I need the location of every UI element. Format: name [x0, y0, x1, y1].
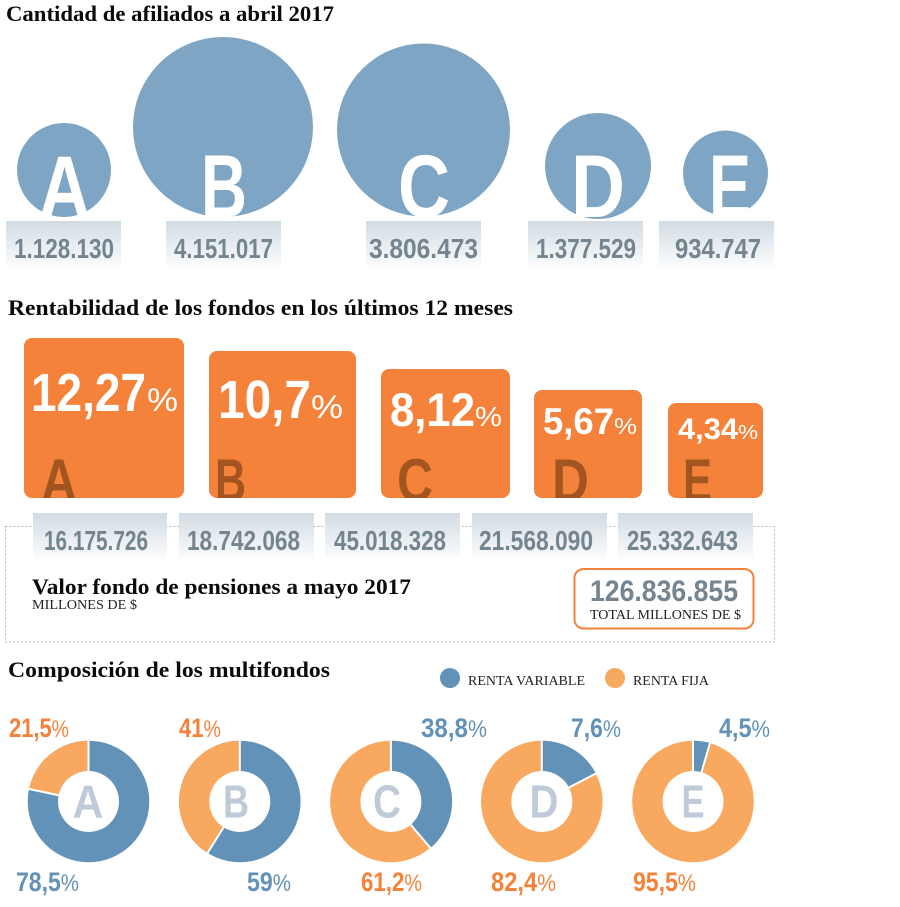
bubble B — [133, 37, 313, 236]
bubble E: E — [709, 136, 751, 236]
donut A: A — [72, 776, 104, 828]
bubble C: C — [398, 136, 450, 236]
label B renta variable: 59% — [247, 867, 291, 897]
bubble D — [545, 113, 651, 236]
square A: rentabilidad: 12,27 — [31, 363, 146, 423]
legend — [440, 668, 710, 689]
square C: rentabilidad — [381, 369, 510, 498]
square A: rentabilidad: % — [147, 382, 178, 418]
label B renta fija: 41% — [179, 713, 221, 743]
fondo value A: 16.175.726 — [44, 525, 148, 556]
square D: rentabilidad — [534, 390, 642, 498]
label D renta fija: 82,4% — [491, 867, 556, 897]
afiliados value E: 934.747 — [675, 233, 761, 264]
fondo value C: 45.018.328 — [334, 525, 446, 556]
bubble A — [17, 123, 111, 237]
fondo value B: 18.742.068 — [187, 525, 300, 556]
title: cantidad de afiliados: Cantidad de afiliados a abril 2017 — [6, 1, 334, 26]
square C: rentabilidad: % — [475, 401, 502, 432]
square B: rentabilidad — [209, 351, 356, 514]
bubble D: D — [571, 136, 625, 236]
square A: rentabilidad: A — [41, 447, 77, 514]
square E: rentabilidad: E — [683, 447, 712, 514]
fondo value E: 25.332.643 — [627, 525, 738, 556]
afiliados value A: 1.128.130 — [14, 233, 114, 264]
donut A — [28, 741, 149, 862]
title: composición: Composición de los multifondos — [8, 657, 330, 682]
callout: total: 126.836.855 — [590, 575, 738, 608]
bubble chart: afiliados — [17, 37, 768, 237]
title: rentabilidad: Rentabilidad de los fondos en los últimos 12 meses — [8, 295, 513, 320]
fondo value D: 21.568.090 — [479, 525, 593, 556]
square E: rentabilidad: % — [738, 422, 758, 444]
fondo value B — [179, 513, 314, 559]
afiliados value C: 3.806.473 — [369, 233, 478, 264]
square E: rentabilidad — [668, 403, 763, 498]
label A renta fija: 21,5% — [9, 713, 69, 743]
square C: rentabilidad: 8,12 — [390, 383, 475, 436]
donut B: B — [223, 776, 249, 828]
label D renta variable: 7,6% — [571, 713, 621, 743]
donut C: C — [373, 776, 401, 828]
donut E: E — [682, 776, 704, 828]
fondo value E — [618, 513, 753, 559]
label A renta variable: 78,5% — [16, 867, 79, 897]
donut E — [632, 741, 754, 862]
donut D: D — [530, 776, 558, 828]
legend: RENTA FIJA — [633, 674, 710, 689]
label C renta fija: 61,2% — [361, 867, 422, 897]
callout: total: TOTAL MILLONES DE $ — [590, 608, 741, 623]
square D: rentabilidad: % — [614, 413, 637, 439]
fondo value A — [33, 513, 167, 559]
label C renta variable: 38,8% — [421, 713, 487, 743]
legend: RENTA VARIABLE — [468, 674, 585, 689]
bubble A: A — [38, 137, 90, 237]
square B: rentabilidad: % — [311, 389, 343, 425]
afiliados value B — [166, 221, 281, 267]
bubble B: B — [201, 136, 247, 236]
square D: rentabilidad: D — [552, 447, 589, 514]
label E renta fija: 95,5% — [633, 867, 696, 897]
square D: rentabilidad: 5,67 — [543, 401, 614, 442]
donut C — [330, 741, 452, 862]
bubble C — [337, 44, 510, 236]
afiliados value A — [6, 221, 121, 267]
fondo value D — [472, 513, 607, 559]
donut B — [179, 741, 301, 862]
afiliados value D — [528, 221, 643, 267]
heading: valor fondo de pensiones: MILLONES DE $ — [32, 598, 137, 613]
afiliados value D: 1.377.529 — [536, 233, 636, 264]
square C: rentabilidad: C — [397, 447, 433, 514]
heading: valor fondo de pensiones: Valor fondo de pensiones a mayo 2017 — [32, 574, 411, 599]
afiliados value B: 4.151.017 — [174, 233, 273, 264]
square E: rentabilidad: 4,34 — [678, 413, 738, 446]
bubble E — [683, 130, 768, 236]
afiliados value C — [366, 221, 481, 267]
square A: rentabilidad — [24, 338, 184, 514]
square B: rentabilidad: 10,7 — [218, 370, 311, 430]
afiliados value E — [659, 221, 774, 267]
label E renta variable: 4,5% — [719, 713, 770, 743]
square B: rentabilidad: B — [215, 447, 246, 514]
fondo value C — [325, 513, 460, 559]
callout: total — [574, 569, 754, 628]
heading: valor fondo de pensiones — [32, 574, 411, 613]
donut D — [481, 741, 603, 862]
